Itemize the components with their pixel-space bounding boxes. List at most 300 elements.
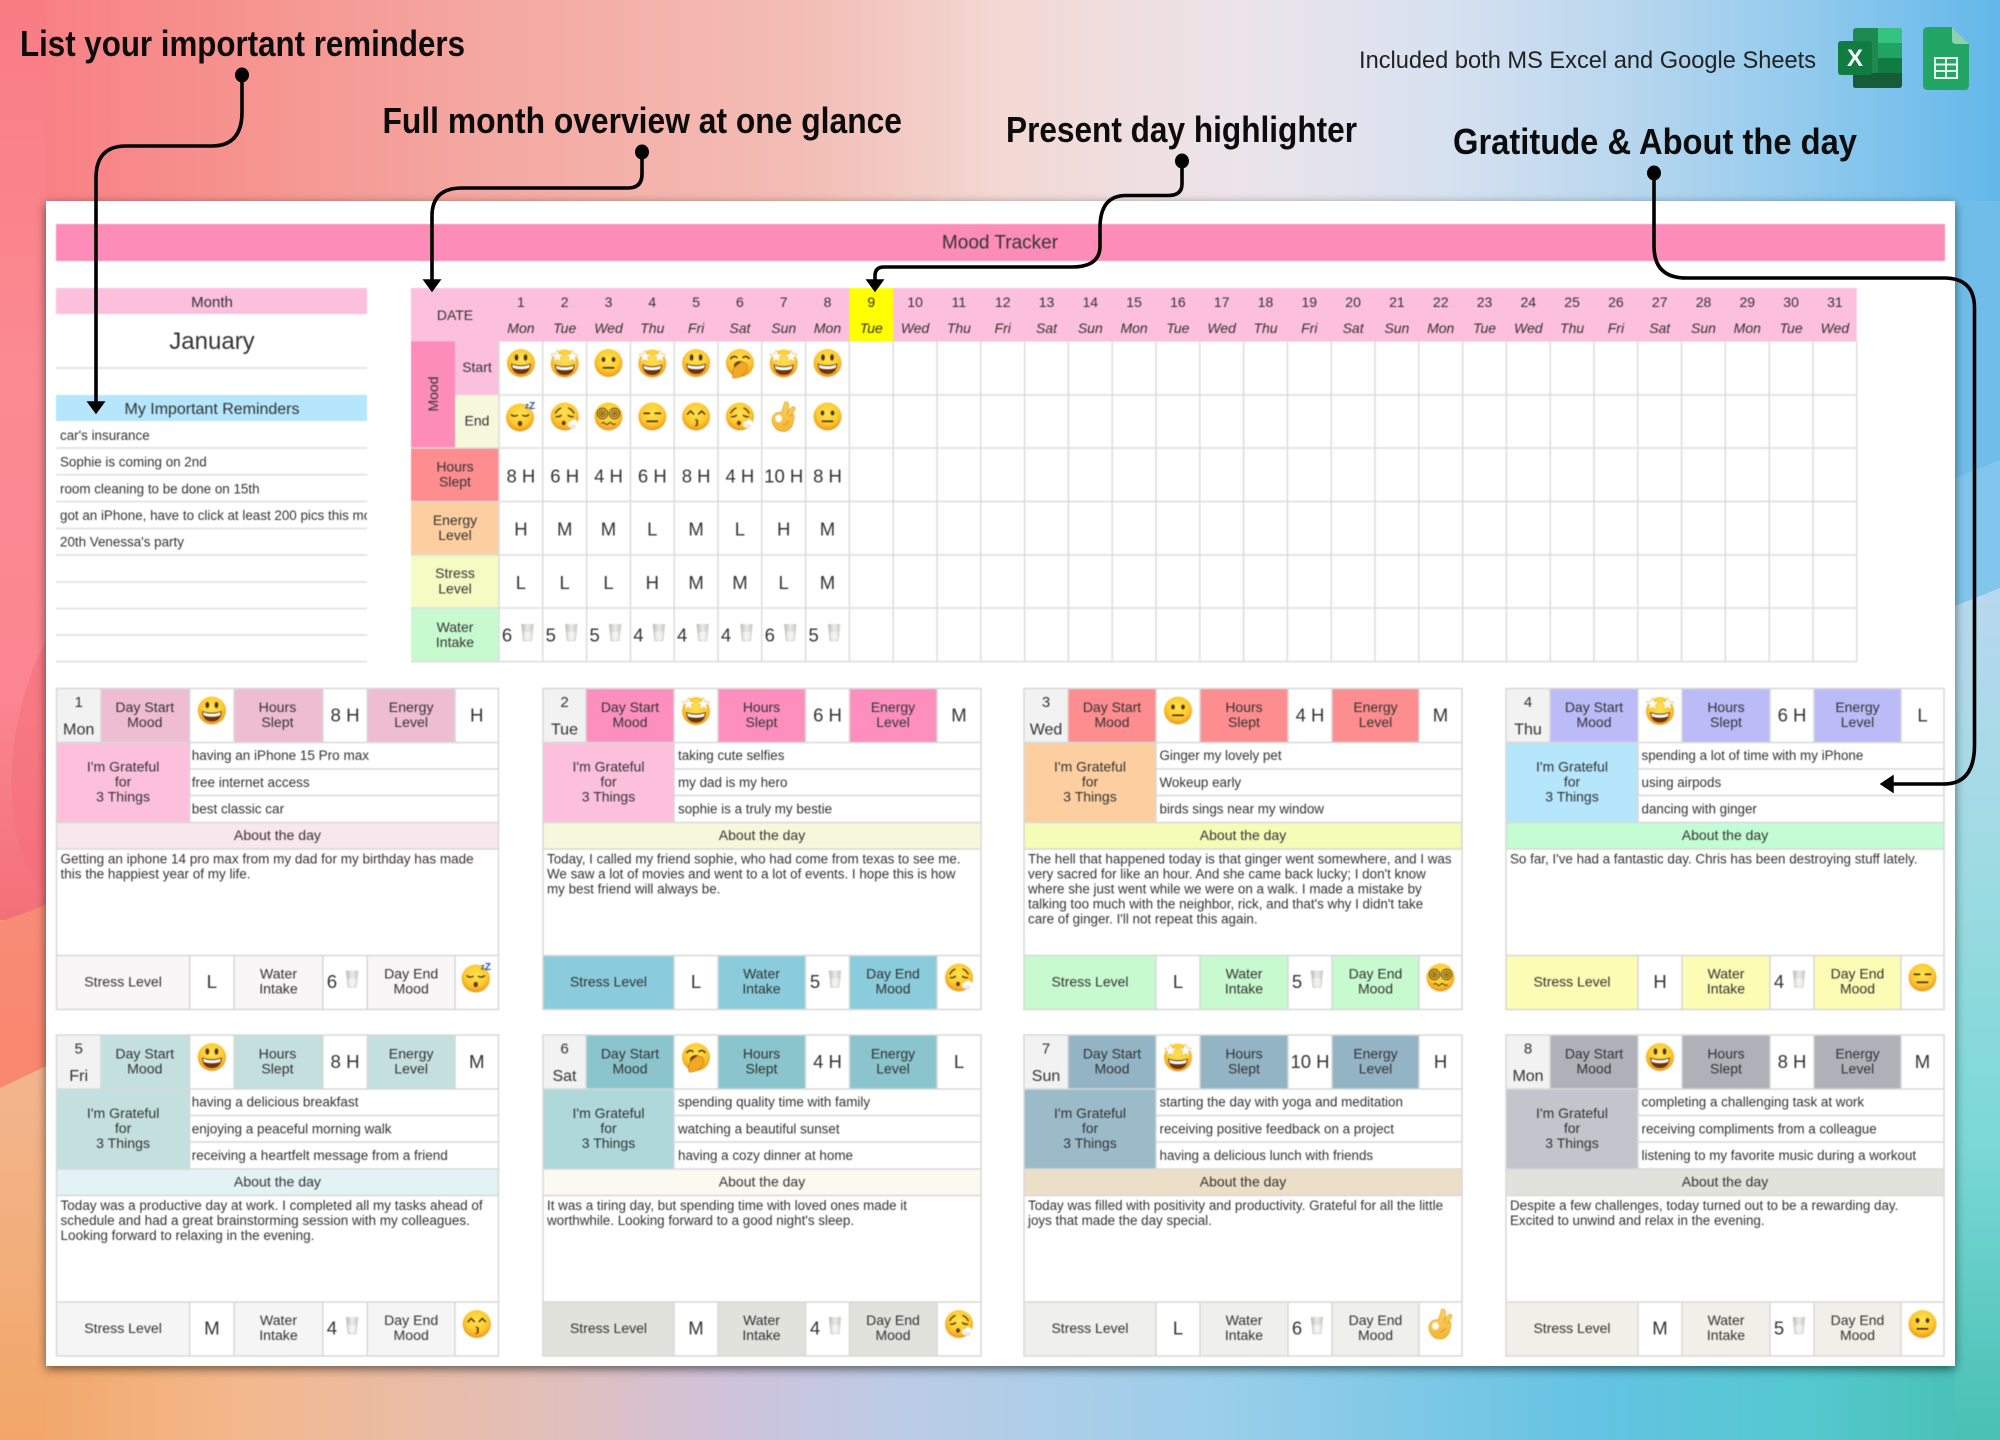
card: day 7: starting the day with yoga and meditation [1160, 1094, 1403, 1109]
row: stress level values: L [516, 572, 526, 593]
card: day 2: L [691, 971, 701, 992]
table row: date header: Thu [640, 320, 665, 336]
card: day 3: 3 [1042, 694, 1050, 711]
card: day 5: 8 H [331, 1051, 360, 1072]
card: day 6: About the day [719, 1173, 805, 1189]
card: day 4: Mood [1840, 980, 1875, 996]
card: day 5: schedule and had a great brainstorming session with my colleagues. [61, 1213, 470, 1228]
card: day 2: Energy [871, 699, 915, 715]
row: stress level values: L [603, 572, 614, 593]
white sheet panel [46, 201, 1955, 1366]
title bar: Mood Tracker [56, 224, 1945, 261]
card: day 7: 10 H [1290, 1051, 1330, 1072]
chart: monthly tracker table: Energy [433, 512, 477, 528]
table row: date header: 9 [867, 294, 875, 310]
table row: date header: 20 [1345, 294, 1361, 310]
card: day 7: Mood [1094, 1060, 1130, 1076]
card: day 6: worthwhile. Looking forward to a good night's sleep. [546, 1213, 854, 1228]
table row: date header: Tue [1780, 320, 1803, 336]
row: energy level values: M [820, 518, 835, 540]
card: day 3: talking too much with the neighbor, rick, and that's why I didn't take [1028, 896, 1423, 911]
table row: date header: 26 [1608, 294, 1624, 310]
row: hours slept values: 6 H [638, 466, 667, 486]
table row: date header: 1 [517, 294, 525, 310]
table row: date header: Thu [1253, 320, 1278, 336]
card: day 8: Water [1708, 1312, 1745, 1328]
card: day 1: 6 [327, 971, 337, 992]
card: day 3: M [1433, 704, 1448, 725]
card: day 3: birds sings near my window [1160, 801, 1324, 816]
card: day 2: Today, I called my friend sophie, who had come from texas to see me. [547, 851, 961, 866]
card: day 2: 3 Things [582, 788, 635, 804]
card: day 8: completing a challenging task at work [1642, 1094, 1864, 1109]
table row: date header: 8 [824, 294, 832, 310]
card: day 2: M [951, 704, 967, 725]
chart: monthly tracker table: Start [462, 359, 492, 375]
card: day 3: The hell that happened today is that ginger went somewhere, and I was [1028, 851, 1452, 866]
row: hours slept values: 8 H [682, 466, 710, 486]
table row: date header: 24 [1521, 294, 1536, 310]
card: day 2: Slept [746, 714, 778, 730]
table row: date header: Fri [1608, 320, 1625, 336]
row: energy level values: H [514, 518, 528, 540]
table row: date header: 30 [1783, 294, 1799, 310]
heading: List your important reminders: List your important reminders [20, 23, 465, 64]
card: day 7 [1024, 1035, 1462, 1356]
card: day 3: where she just went while we were on a walk. I made a mistake by [1027, 881, 1422, 896]
table row: date header: 5 [692, 294, 700, 310]
panel: important reminders: got an iPhone, have to click at least 200 pics this month [60, 508, 390, 523]
card: day 6: Day End [866, 1312, 920, 1328]
card: day 1 [56, 688, 498, 1010]
card: day 1: 1 [74, 694, 83, 711]
card: day 1: free internet access [192, 775, 310, 790]
card: day 5: Day End [384, 1312, 438, 1328]
table row: date header: Fri [1301, 320, 1318, 336]
card: day 1: Level [394, 714, 428, 730]
row: hours slept values: 4 H [594, 466, 623, 486]
card: day 7: Today was filled with positivity and productivity. Grateful for all the little [1028, 1198, 1443, 1213]
panel: important reminders: My Important Reminders [124, 401, 300, 418]
card: day 5: for [115, 1120, 132, 1136]
card: day 2: Level [876, 714, 910, 730]
card: day 3: Water [1226, 965, 1263, 981]
card: day 1: Hours [259, 699, 296, 715]
row: water intake values: 4 [677, 624, 687, 646]
table row: date header: Fri [688, 320, 705, 336]
row: hours slept values: 10 H [764, 466, 803, 486]
card: day 7: Energy [1353, 1045, 1398, 1061]
table row: date header: Thu [1560, 320, 1584, 336]
card: day 5: 5 [74, 1040, 83, 1057]
card: day 7: Hours [1225, 1045, 1263, 1061]
row: energy level values: L [647, 518, 657, 540]
panel: important reminders: 20th Venessa's party [60, 534, 184, 550]
card: day 4: Mood [1576, 714, 1612, 730]
row: hours slept values: 4 H [726, 466, 754, 486]
card: day 7: About the day [1200, 1173, 1286, 1189]
card: day 5: Mood [127, 1060, 162, 1076]
card: day 3: Wed [1030, 721, 1062, 738]
row: stress level values: L [560, 572, 570, 593]
card: day 2: sophie is a truly my bestie [678, 801, 832, 816]
card: day 8 [1506, 1035, 1944, 1356]
row: energy level values: M [688, 518, 704, 540]
chart: monthly tracker table: Mood [425, 376, 441, 412]
card: day 5: Day Start [115, 1045, 174, 1061]
card: day 8: Slept [1710, 1060, 1742, 1076]
table row: date header: Sat [1343, 320, 1365, 336]
card: day 6: spending quality time with family [678, 1094, 870, 1109]
card: day 4: spending a lot of time with my iPhone [1642, 748, 1863, 763]
card: day 4: Hours [1707, 699, 1745, 715]
card: day 8: M [1915, 1051, 1930, 1072]
card: day 1: Energy [389, 699, 434, 715]
card: day 1: 8 H [331, 704, 360, 725]
row: water intake values [502, 624, 840, 646]
table row: date header: Sun [1691, 320, 1716, 336]
card: day 5: Hours [259, 1045, 296, 1061]
card: day 2: About the day [719, 827, 805, 843]
card: day 2: my dad is my hero [678, 775, 787, 790]
table row: date header: Tue [860, 320, 883, 336]
card: day 8: Excited to unwind and relax in the evening. [1510, 1213, 1765, 1228]
card: day 5: 4 [327, 1317, 337, 1338]
card: day 4: So far, I've had a fantastic day. Chris has been destroying stuff lately. [1510, 851, 1917, 866]
card: day 6: Hours [743, 1045, 780, 1061]
card: day 6: having a cozy dinner at home [678, 1148, 853, 1163]
card: day 7: Sun [1032, 1068, 1060, 1085]
arrow: month overview [424, 144, 649, 291]
table row: date header: Sun [1384, 320, 1410, 336]
panel: month selector: Month [191, 294, 233, 311]
card: day 2: Mood [612, 714, 648, 730]
card: day 3: 5 [1292, 971, 1302, 992]
card: day 3: Mood [1094, 714, 1130, 730]
card: day 4: Water [1708, 965, 1745, 981]
card: day 5: About the day [234, 1173, 321, 1189]
card: day 4: Energy [1835, 699, 1880, 715]
table row: date header: DATE [437, 307, 473, 323]
table row: date header: 29 [1740, 294, 1755, 310]
card: day 7: Level [1359, 1060, 1392, 1076]
card: day 2: Water [743, 965, 780, 981]
card: day 6: Energy [871, 1045, 915, 1061]
card: day 1: Mood [127, 714, 162, 730]
card: day 4: Slept [1710, 714, 1742, 730]
card: day 5: Intake [259, 1327, 298, 1343]
card: day 3: Intake [1225, 980, 1263, 996]
card: day 1: for [115, 773, 132, 789]
card: day 3 [1024, 688, 1462, 1010]
card: day 5: Energy [389, 1045, 434, 1061]
card: day 2: Stress Level [570, 973, 647, 989]
table row: date header: Sat [729, 320, 752, 336]
card: day 8: receiving compliments from a colleague [1642, 1121, 1877, 1136]
card: day 6: L [954, 1051, 964, 1072]
card: day 5: enjoying a peaceful morning walk [192, 1121, 392, 1136]
row: stress level values: M [688, 572, 704, 593]
card: day 5: M [469, 1051, 485, 1072]
card: day 2: Intake [742, 980, 781, 996]
card: day 2: Day Start [601, 699, 659, 715]
table row: date header: 12 [995, 294, 1011, 310]
card: day 1: having an iPhone 15 Pro max [192, 748, 369, 763]
card: day 5: Today was a productive day at work. I completed all my tasks ahead of [61, 1198, 483, 1213]
card: day 6: watching a beautiful sunset [677, 1121, 840, 1136]
table row: date header: 16 [1170, 294, 1186, 310]
card: day 1: 3 Things [96, 788, 150, 804]
icon: Microsoft Excel: X [1847, 45, 1863, 72]
card: day 6: Stress Level [570, 1320, 647, 1336]
card: day 6: for [600, 1120, 617, 1136]
card: day 8: Despite a few challenges, today turned out to be a rewarding day. [1510, 1198, 1898, 1213]
card: day 5: I'm Grateful [87, 1105, 159, 1121]
card: day 8: 5 [1774, 1317, 1784, 1338]
card: day 2: 2 [560, 694, 569, 711]
card: day 5: M [204, 1317, 220, 1338]
card: day 6: Mood [875, 1327, 911, 1343]
panel: important reminders: room cleaning to be done on 15th [60, 482, 260, 496]
card: day 2: 5 [810, 971, 820, 992]
card: day 4: Intake [1707, 980, 1745, 996]
table row: date header: 15 [1126, 294, 1142, 310]
chart: monthly tracker table: Intake [436, 634, 474, 650]
card: day 3: Ginger my lovely pet [1160, 748, 1282, 763]
card: day 6: Sat [552, 1068, 577, 1085]
card: day 2: I'm Grateful [573, 758, 644, 774]
card: day 6: Mood [612, 1060, 648, 1076]
card: day 1: Getting an iphone 14 pro max from my dad for my birthday has made [61, 851, 474, 866]
table row: date header: Wed [901, 320, 931, 336]
card: day 1: About the day [234, 827, 321, 843]
table row: date header: Wed [594, 320, 624, 336]
card: day 5: Level [394, 1060, 428, 1076]
table row: date header: Mon [1734, 320, 1761, 336]
card: day 1: Day End [384, 965, 438, 981]
table row: date header: Mon [814, 320, 841, 336]
row: energy level values: H [777, 518, 790, 540]
card: day 5: Stress Level [84, 1320, 162, 1336]
card: day 8: 3 Things [1545, 1135, 1599, 1151]
card: day 3: care of ginger. I'll not repeat this again. [1028, 911, 1258, 926]
row: mood end emojis [506, 401, 842, 432]
panel: month selector [56, 288, 367, 368]
card: day 7: Intake [1225, 1327, 1263, 1343]
table row: date header: 3 [605, 294, 613, 310]
arrow: reminders [88, 68, 249, 413]
card: day 5: Looking forward to relaxing in the evening. [61, 1228, 314, 1243]
card: day 5: 3 Things [96, 1135, 150, 1151]
card: day 8: I'm Grateful [1536, 1105, 1608, 1121]
row: energy level values [514, 518, 835, 540]
card: day 1: H [470, 704, 483, 725]
card: day 7: Slept [1228, 1060, 1260, 1076]
card: day 8: Mood [1576, 1060, 1612, 1076]
table row: date header: Mon [1120, 320, 1148, 336]
table row: date header: Sun [771, 320, 796, 336]
card: day 4: 6 H [1778, 704, 1806, 725]
table row: date header: Fri [995, 320, 1012, 336]
row: hours slept values: 8 H [813, 466, 842, 486]
card: day 8: M [1652, 1317, 1668, 1338]
table row: date header: Sun [1078, 320, 1103, 336]
card: day 4: Level [1841, 714, 1874, 730]
table row: date header: Wed [1514, 320, 1544, 336]
card: day 4: About the day [1682, 827, 1768, 843]
card: day 4: 4 [1524, 694, 1532, 711]
card: day 5 [56, 1035, 498, 1356]
table row: date header: Tue [553, 320, 576, 336]
card: day 1: Intake [259, 980, 298, 996]
arrow: gratitude and about the day [1647, 166, 1974, 792]
card: day 6: 3 Things [582, 1135, 635, 1151]
card: day 8: listening to my favorite music during a workout [1642, 1148, 1916, 1163]
card: day 7: Mood [1358, 1327, 1393, 1343]
chart: monthly tracker table: Level [438, 580, 472, 596]
card: day 2: We saw a lot of movies and went to a lot of events. I hope this is how [547, 866, 956, 881]
card: day 1: this the happiest year of my life. [61, 866, 251, 881]
card: day 3: About the day [1200, 827, 1286, 843]
row: mood start emojis [507, 349, 842, 378]
card: day 2 [543, 688, 981, 1010]
card: day 3: Day Start [1083, 699, 1141, 715]
card: day 3: Mood [1358, 980, 1393, 996]
card: day 5: Fri [69, 1067, 88, 1085]
card: day 3: Slept [1228, 714, 1260, 730]
card: day 4: using airpods [1642, 775, 1721, 790]
card: day 4: dancing with ginger [1642, 801, 1757, 816]
card: day 2: my best friend will always be. [547, 881, 720, 896]
card: day 7: joys that made the day special. [1027, 1213, 1212, 1228]
table row: date header: Mon [507, 320, 535, 336]
card: day 8: Mon [1512, 1068, 1544, 1085]
chart: monthly tracker table: Hours [436, 458, 474, 474]
card: day 1: I'm Grateful [87, 758, 159, 774]
title bar: Mood Tracker: Mood Tracker [942, 232, 1059, 254]
card: day 2: Day End [866, 965, 920, 981]
card: day 3: Day End [1349, 965, 1402, 981]
card: day 8: Intake [1707, 1327, 1745, 1343]
card: day 8: Stress Level [1533, 1320, 1611, 1336]
card: day 4: H [1653, 971, 1667, 992]
row: hours slept values [507, 466, 842, 486]
card: day 5: Water [260, 1312, 297, 1328]
card: day 7: Stress Level [1051, 1320, 1129, 1336]
card: day 6: Day Start [601, 1045, 659, 1061]
card: day 3: Hours [1225, 699, 1263, 715]
table row: date header: 17 [1214, 294, 1230, 310]
card: day 8: About the day [1682, 1173, 1768, 1189]
card: day 1: Stress Level [84, 973, 162, 989]
table row: date header: Wed [1821, 320, 1850, 336]
table row: date header: 10 [907, 294, 923, 310]
card: day 8: 8 H [1778, 1051, 1806, 1072]
card: day 1: Mood [394, 980, 429, 996]
arrow: present day highlighter [867, 154, 1189, 291]
panel: month selector: January [169, 328, 255, 355]
card: day 3: 4 H [1296, 704, 1324, 725]
card: day 1: best classic car [192, 801, 285, 816]
card: day 6: 6 [560, 1040, 569, 1057]
card: day 3: very sacred for like an hour. And she came back lucky; I don't know [1028, 866, 1426, 881]
card: day 8: Hours [1707, 1045, 1745, 1061]
table row: date header: Sat [1036, 320, 1058, 336]
icon: Microsoft Excel [1838, 28, 1902, 88]
table row: date header: 21 [1389, 294, 1405, 310]
card: day 6: Water [743, 1312, 780, 1328]
row: stress level values: L [779, 572, 789, 593]
card: day 7: receiving positive feedback on a project [1160, 1121, 1394, 1136]
table row: date header: 19 [1302, 294, 1317, 310]
card: day 4 [1506, 688, 1944, 1010]
card: day 7: having a delicious lunch with friends [1160, 1148, 1373, 1163]
row: water intake values: 6 [502, 624, 512, 646]
chart: monthly tracker table [411, 288, 1857, 662]
card: day 3: Energy [1353, 699, 1398, 715]
card: day 5: Slept [261, 1060, 294, 1076]
card: day 8: Mood [1840, 1327, 1875, 1343]
card: day 7: I'm Grateful [1054, 1105, 1126, 1121]
card: day 3: 3 Things [1063, 788, 1117, 804]
card: day 6: Level [876, 1060, 910, 1076]
table row: date header: 22 [1433, 294, 1449, 310]
card: day 6: I'm Grateful [573, 1105, 644, 1121]
table row: date header: 14 [1083, 294, 1098, 310]
card: day 7: 6 [1292, 1317, 1302, 1338]
row: water intake values: 5 [808, 624, 819, 646]
row: energy level values: M [601, 518, 616, 540]
card: day 5: receiving a heartfelt message from a friend [192, 1148, 448, 1163]
table row: date header: Tue [1166, 320, 1190, 336]
table row: date header: 6 [736, 294, 744, 310]
card: day 8: Level [1841, 1060, 1874, 1076]
card: day 7: Water [1226, 1312, 1263, 1328]
card: day 4: Stress Level [1533, 973, 1611, 989]
card: day 4: Day End [1831, 965, 1884, 981]
card: day 2: taking cute selfies [678, 748, 785, 763]
table row: date header: 23 [1477, 294, 1492, 310]
card: day 7: Day End [1349, 1312, 1402, 1328]
card: day 1: Slept [261, 714, 294, 730]
card: day 1: Mon [63, 720, 94, 738]
table row: date header: 28 [1696, 294, 1711, 310]
card: day 7: 7 [1042, 1040, 1050, 1057]
card: day 4: L [1917, 704, 1928, 725]
card: day 8: Day Start [1565, 1045, 1623, 1061]
table row: date header: Thu [947, 320, 971, 336]
card: day 4: I'm Grateful [1536, 758, 1608, 774]
card: day 2: Mood [875, 980, 911, 996]
table row: date header: 31 [1827, 294, 1843, 310]
panel: important reminders: Sophie is coming on 2nd [60, 454, 207, 470]
card: day 4: 4 [1774, 971, 1784, 992]
table row: date header: 7 [780, 294, 788, 310]
card: day 8: 8 [1524, 1040, 1532, 1057]
card: day 5: Mood [394, 1327, 429, 1343]
card: day 7: Day Start [1083, 1045, 1141, 1061]
row: stress level values: M [820, 572, 835, 593]
card: day 6: M [688, 1317, 704, 1338]
row: water intake values: 6 [765, 624, 775, 646]
card: day 4: Day Start [1565, 699, 1623, 715]
heading: Full month overview at one glance: Full month overview at one glance [382, 100, 902, 141]
card: day 7: L [1173, 1317, 1183, 1338]
table row: date header: Mon [1427, 320, 1455, 336]
card: day 2: 6 H [813, 704, 842, 725]
card: day 3: I'm Grateful [1054, 758, 1126, 774]
panel: important reminders [56, 395, 390, 662]
